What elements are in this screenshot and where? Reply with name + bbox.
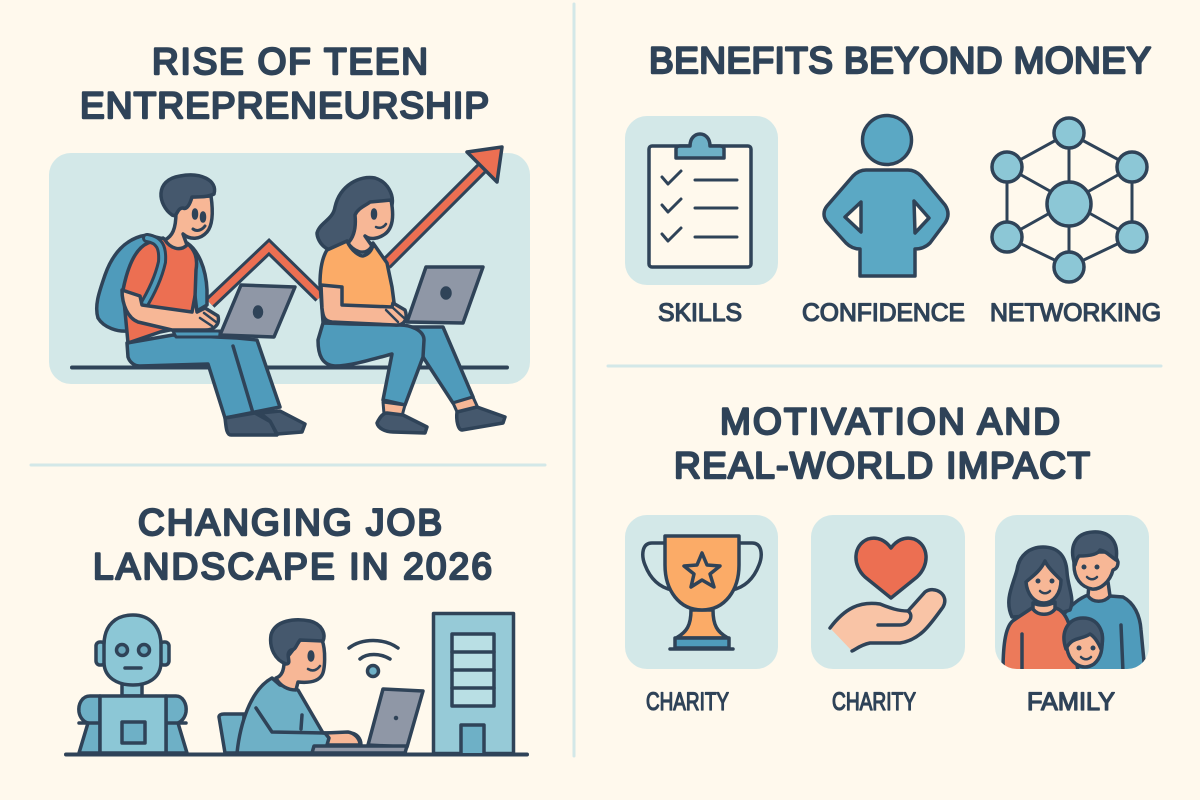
title: Changing Job Landscape in 2026 [93,502,492,587]
growth arrow [210,147,502,303]
labels: benefits: NETWORKING [990,299,1161,327]
title: Changing Job Landscape in 2026: CHANGING JOB [138,502,442,543]
icon: confidence person [824,116,948,276]
laptop [312,689,423,753]
labels: motivation: FAMILY [1027,688,1115,716]
icon: family [995,515,1149,672]
title: Motivation and Real-World Impact [674,401,1090,486]
girl [317,177,505,433]
illustration: robot, remote worker and office [66,614,527,754]
title: Benefits Beyond Money: BENEFITS BEYOND MONEY [649,40,1151,81]
title: Changing Job Landscape in 2026: LANDSCAPE IN 2026 [93,546,492,587]
labels: motivation [646,688,1115,716]
icon: networking graph [992,118,1147,282]
title: Rise of Teen Entrepreneurship [80,41,489,126]
title: Motivation and Real-World Impact: MOTIVATION AND [720,401,1060,442]
office building [434,614,514,754]
labels: motivation: CHARITY [646,688,729,716]
boy with backpack [97,175,305,435]
wifi signal [349,640,398,676]
icon: trophy [625,515,778,669]
remote worker at laptop [219,620,361,753]
title: Motivation and Real-World Impact: REAL-WORLD IMPACT [674,445,1090,486]
icon: heart in hand [811,515,965,669]
icon: skills clipboard [625,116,778,285]
title: Rise of Teen Entrepreneurship: RISE OF TEEN [152,41,428,82]
labels: benefits: CONFIDENCE [802,299,965,327]
labels: benefits [658,299,1161,327]
title: Rise of Teen Entrepreneurship: ENTREPRENEURSHIP [80,85,489,126]
robot [79,615,187,753]
illustration: two teens with laptops and growth arrow [49,147,530,435]
labels: benefits: SKILLS [658,299,742,327]
labels: motivation: CHARITY [832,688,916,716]
